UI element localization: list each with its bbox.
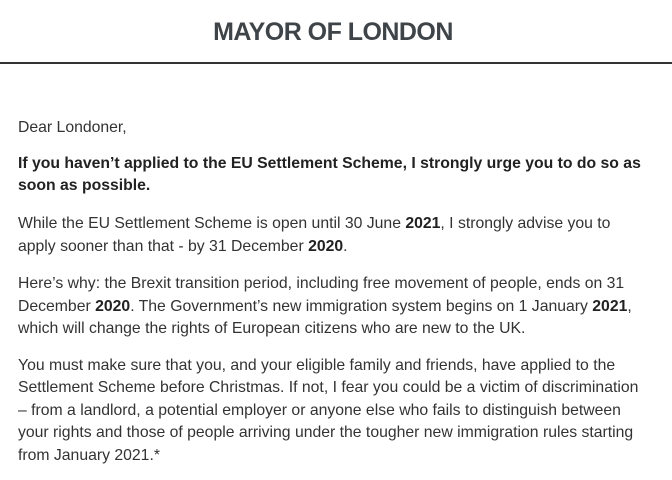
logo: Mayor of London wordmark: MAYOR OF LONDON [213, 18, 453, 46]
bold urgent message: If you haven’t applied to the EU Settlement Scheme, I strongly urge you to do so as [18, 155, 641, 172]
paragraph: warning about discrimination: your rights and those of people arriving under the tougher new immigration rules starting [18, 424, 633, 441]
paragraph: transition period explanation: which will change the rights of European citizens who are new to the UK. [18, 320, 525, 337]
paragraph: transition period explanation: Here’s why: the Brexit transition period, including free movement of people, ends on 31 [18, 275, 624, 292]
bold urgent message: soon as possible. [18, 177, 150, 194]
paragraph: warning about discrimination: You must make sure that you, and your eligible family and friends, have applied to the [18, 357, 615, 374]
paragraph: warning about discrimination: from January 2021.* [18, 447, 160, 464]
paragraph: deadline advice: apply sooner than that - by 31 December 2020. [18, 238, 348, 255]
salutation: Dear Londoner, [18, 119, 127, 136]
paragraph: transition period explanation: December 2020. The Government’s new immigration system begins on 1 January 2021, [18, 298, 632, 315]
header divider line [0, 62, 672, 64]
paragraph: warning about discrimination: – from a landlord, a potential employer or anyone else who fails to distinguish between [18, 402, 621, 419]
paragraph: warning about discrimination: Settlement Scheme before Christmas. If not, I fear you could be a victim of discrimination [18, 379, 638, 396]
paragraph: deadline advice: While the EU Settlement Scheme is open until 30 June 2021, I strongly advise you to [18, 215, 610, 232]
